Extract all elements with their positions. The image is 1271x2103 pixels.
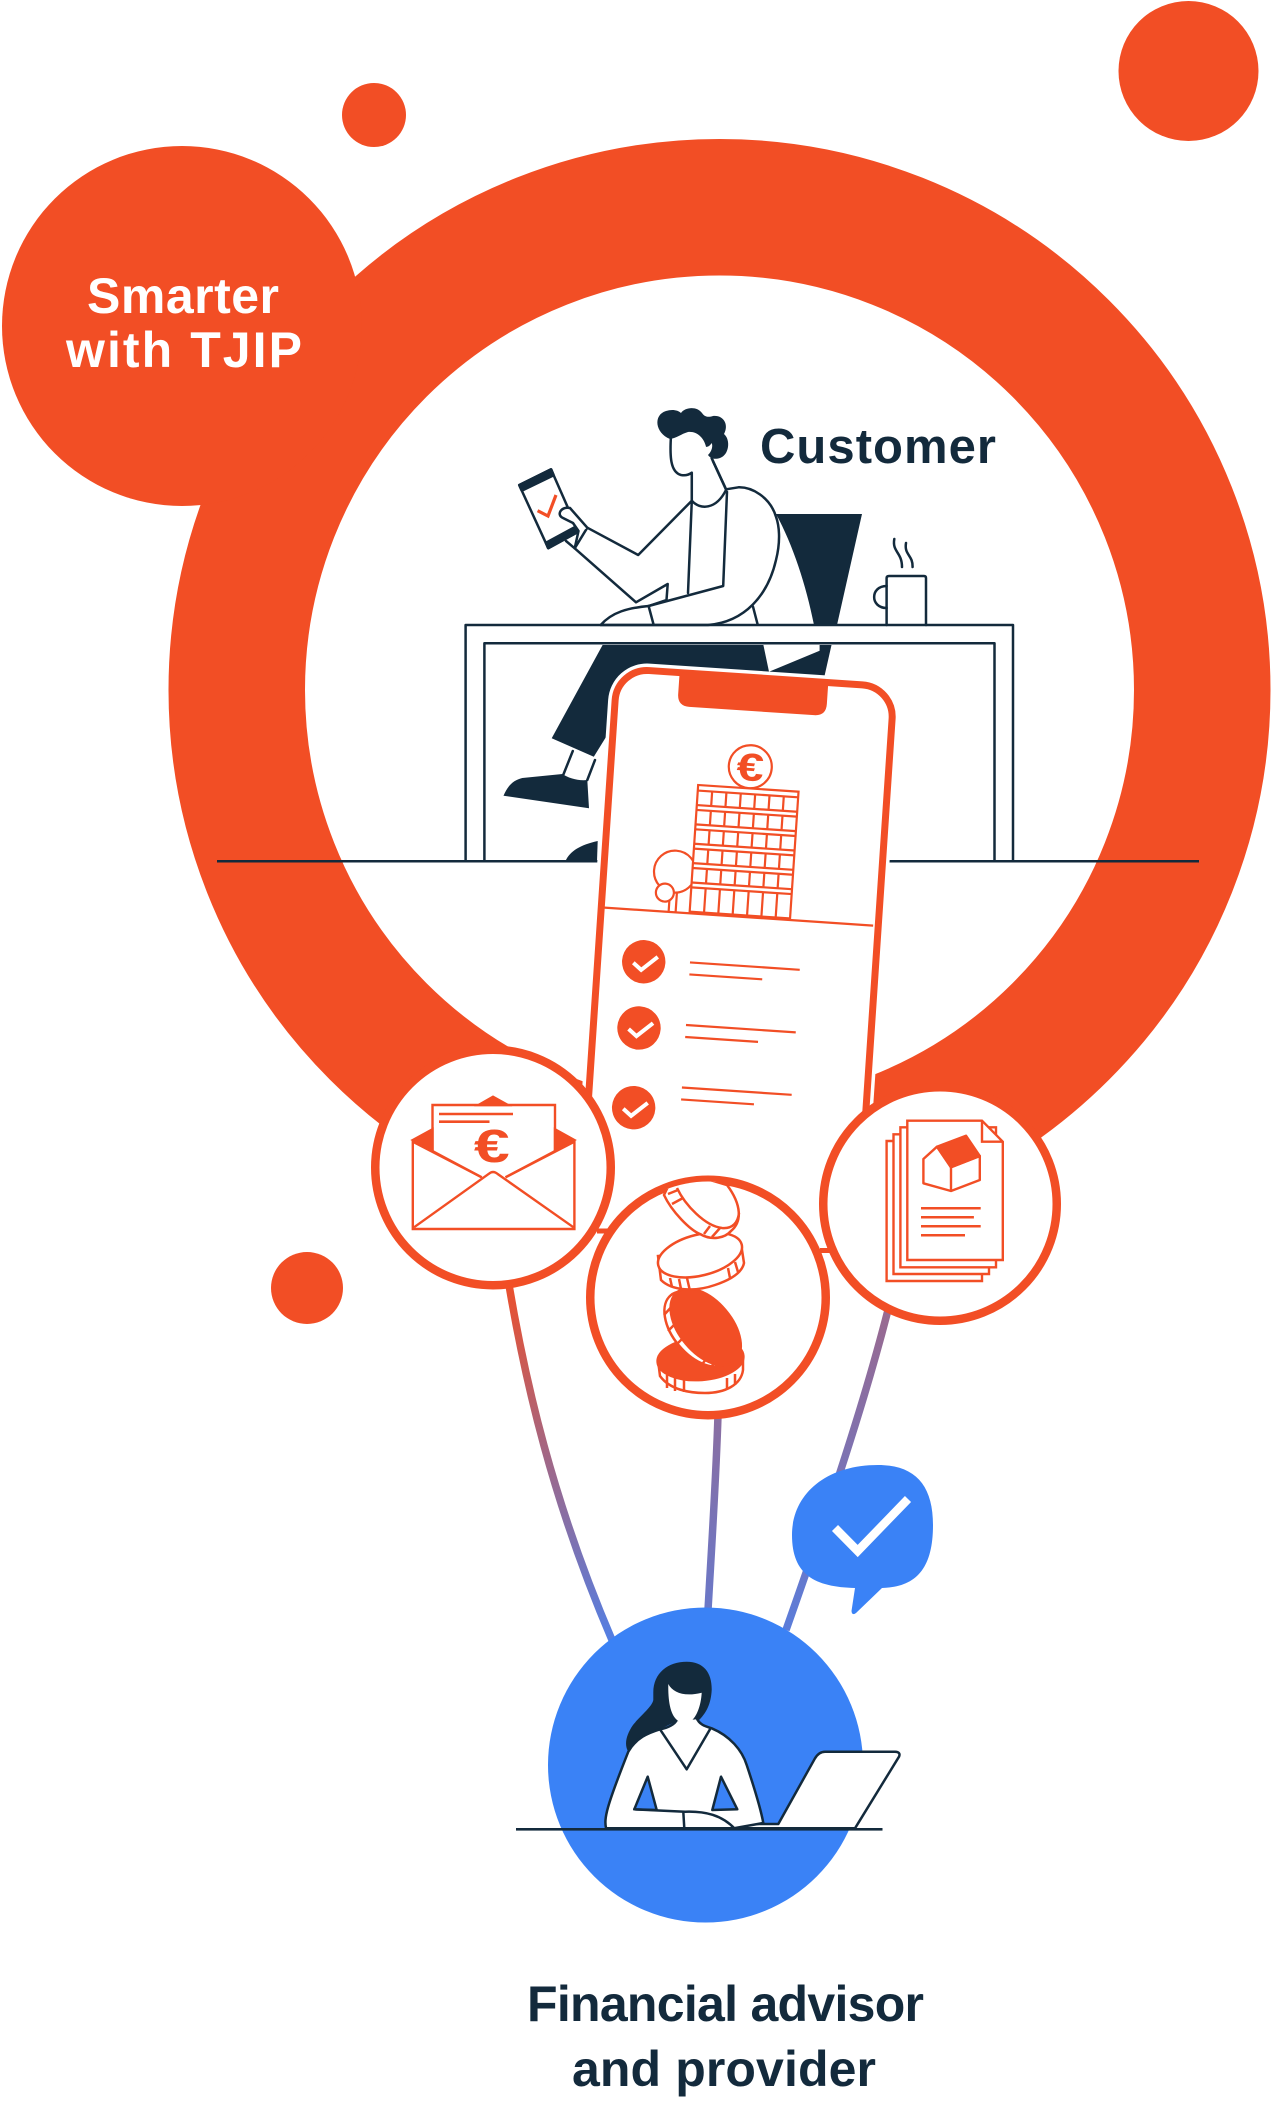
back shoe bbox=[566, 841, 598, 861]
phone notch bbox=[677, 672, 828, 716]
trousers under desk bbox=[552, 645, 832, 757]
stacked pages bbox=[887, 1121, 1003, 1281]
woman hair bbox=[626, 1662, 712, 1752]
ground line: left bbox=[217, 860, 598, 862]
check mark bbox=[835, 1499, 908, 1551]
connector line: documents to advisor bbox=[786, 1310, 888, 1630]
arm gap right bbox=[712, 1777, 737, 1810]
euro coin on building bbox=[727, 744, 773, 791]
desk bbox=[466, 625, 1013, 861]
document text lines bbox=[921, 1208, 981, 1235]
circle: envelope icon bbox=[375, 1050, 611, 1285]
link between envelope and coin circles bbox=[597, 1228, 609, 1234]
top coin bbox=[662, 1182, 740, 1240]
connector line: coins to advisor bbox=[708, 1415, 718, 1610]
phone halo bbox=[579, 668, 894, 1257]
large orange ring bbox=[237, 207, 1202, 1173]
decorative dot: left bbox=[271, 1252, 343, 1324]
euro sign on letter: € bbox=[474, 1120, 510, 1172]
socks bbox=[563, 751, 595, 780]
euro coin on building: € bbox=[735, 745, 765, 790]
front shoe bbox=[504, 774, 589, 808]
envelope bbox=[413, 1097, 574, 1229]
circle: coins icon bbox=[590, 1170, 826, 1415]
phone body bbox=[579, 668, 894, 1257]
checklist row 2 bbox=[616, 1005, 797, 1060]
laptop bbox=[730, 1752, 900, 1828]
advisor label bbox=[527, 1976, 924, 2097]
link between coin and documents circles bbox=[820, 1248, 834, 1253]
advisor table line bbox=[516, 1828, 882, 1831]
customer label: Customer bbox=[760, 420, 996, 474]
woman body bbox=[605, 1718, 763, 1828]
advisor label: and provider bbox=[572, 2041, 876, 2097]
smartphone illustration bbox=[579, 668, 894, 1257]
checklist row 3 bbox=[611, 1083, 792, 1140]
outlined coin bbox=[653, 1225, 747, 1291]
circle: documents icon bbox=[823, 1087, 1057, 1321]
checklist row 1 bbox=[621, 939, 801, 994]
advisor label: Financial advisor bbox=[527, 1976, 924, 2032]
building bbox=[690, 785, 799, 918]
shirt tail bbox=[763, 645, 820, 672]
tree bbox=[651, 849, 697, 914]
customer scene: man at desk bbox=[466, 408, 1013, 861]
badge title: Smarter bbox=[87, 268, 279, 324]
woman face bbox=[668, 1684, 702, 1724]
decorative dot: top bbox=[342, 83, 406, 147]
neckline bbox=[660, 1729, 710, 1769]
forearm lines bbox=[634, 1809, 735, 1829]
badge title bbox=[65, 268, 302, 378]
bottom coin bbox=[656, 1335, 745, 1393]
badge title: with TJIP bbox=[65, 322, 302, 378]
tilted filled coin bbox=[651, 1276, 755, 1379]
speech bubble with check bbox=[792, 1465, 933, 1614]
decorative dot: top right bbox=[1118, 1, 1258, 141]
advisor blue circle bbox=[548, 1608, 863, 1922]
badge circle: Smarter with TJIP bbox=[2, 146, 362, 506]
mug bbox=[874, 539, 926, 625]
chair back bbox=[776, 514, 862, 625]
divider in phone bbox=[601, 907, 873, 926]
arm gap left bbox=[634, 1777, 657, 1810]
man head bbox=[657, 408, 728, 500]
house on document bbox=[923, 1136, 980, 1191]
connector line: envelope to advisor bbox=[509, 1285, 612, 1640]
ground line: right bbox=[889, 860, 1199, 862]
man torso and arms bbox=[575, 458, 779, 625]
handheld phone bbox=[519, 469, 587, 548]
advisor woman at laptop bbox=[605, 1662, 900, 1829]
